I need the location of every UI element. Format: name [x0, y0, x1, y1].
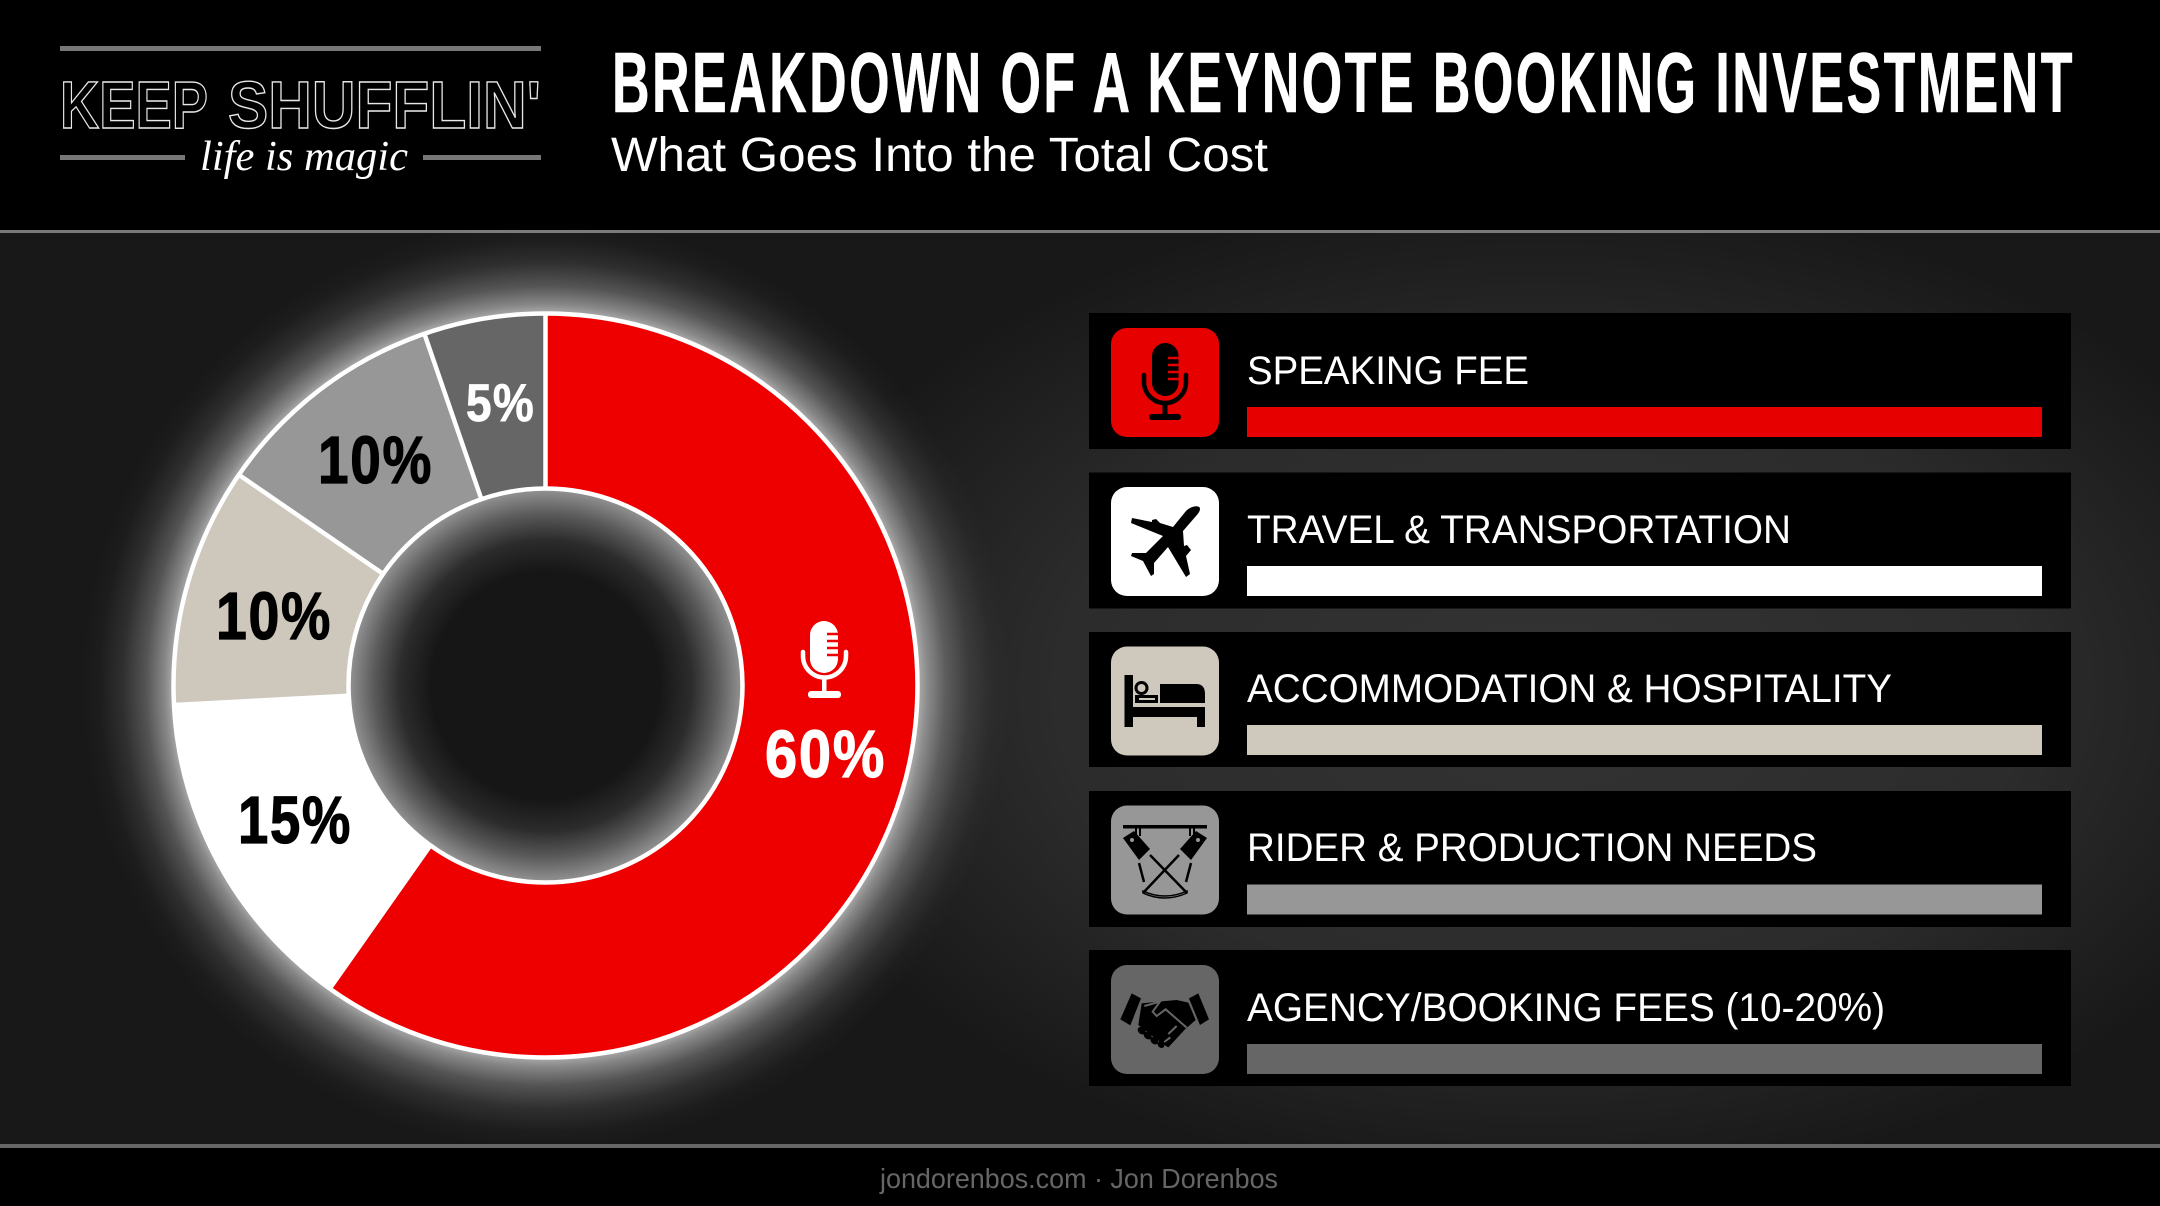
- label: 10% beige: 10%: [216, 579, 332, 654]
- donut hole with inner glow: [348, 488, 742, 882]
- logo: Keep Shufflin': life is magic: [200, 134, 408, 180]
- label: 5%: 5%: [466, 374, 535, 433]
- donut chart: [80, 220, 1010, 1150]
- label: AGENCY/BOOKING FEES (10-20%): [1247, 986, 1885, 1030]
- footer credit: jondorenbos.com · Jon Dorenbos: [879, 1163, 1278, 1194]
- label: ACCOMMODATION & HOSPITALITY: [1247, 667, 1892, 711]
- bar: [1247, 725, 2042, 755]
- label: 10% gray: 10%: [318, 423, 433, 498]
- label: RIDER & PRODUCTION NEEDS: [1247, 826, 1817, 870]
- bar: [1247, 884, 2042, 914]
- icon: microphone on red segment: [803, 621, 846, 698]
- bar: [1247, 566, 2042, 596]
- segment: speaking fee 60%: [332, 314, 918, 1058]
- footer band: [0, 1144, 2160, 1206]
- label: 60%: 60%: [765, 717, 886, 792]
- segment outlines: [174, 314, 918, 1058]
- label: TRAVEL & TRANSPORTATION: [1247, 508, 1791, 552]
- segment: accommodation 10%: [173, 475, 383, 705]
- icon: handshake tile: [1111, 965, 1219, 1074]
- bar: [1247, 407, 2042, 437]
- segment: rider 10%: [239, 334, 481, 574]
- row: accommodation and hospitality: [1089, 632, 2071, 767]
- icon: microphone tile: [1111, 328, 1219, 437]
- icon: airplane tile: [1111, 487, 1219, 596]
- icon: bed tile: [1111, 646, 1219, 756]
- row: agency and booking fees: [1089, 950, 2071, 1086]
- donut outer glow: [80, 220, 1010, 1150]
- logo: Keep Shufflin': KEEP: [60, 68, 208, 143]
- label: SPEAKING FEE: [1247, 349, 1529, 393]
- row: speaking fee: [1089, 313, 2071, 449]
- row: travel and transportation: [1089, 472, 2071, 608]
- segment: agency 5%: [424, 314, 546, 499]
- segment: travel 15%: [174, 696, 432, 990]
- subtitle: What Goes Into the Total Cost: [611, 129, 1268, 182]
- row: rider and production needs: [1089, 791, 2071, 927]
- logo: Keep Shufflin': SHUFFLIN': [228, 68, 541, 143]
- bar: [1247, 1044, 2042, 1074]
- icon: stage lights tile: [1111, 806, 1219, 914]
- label: 15%: 15%: [238, 783, 352, 858]
- logo: Keep Shufflin': [60, 46, 541, 180]
- header band: [0, 0, 2160, 233]
